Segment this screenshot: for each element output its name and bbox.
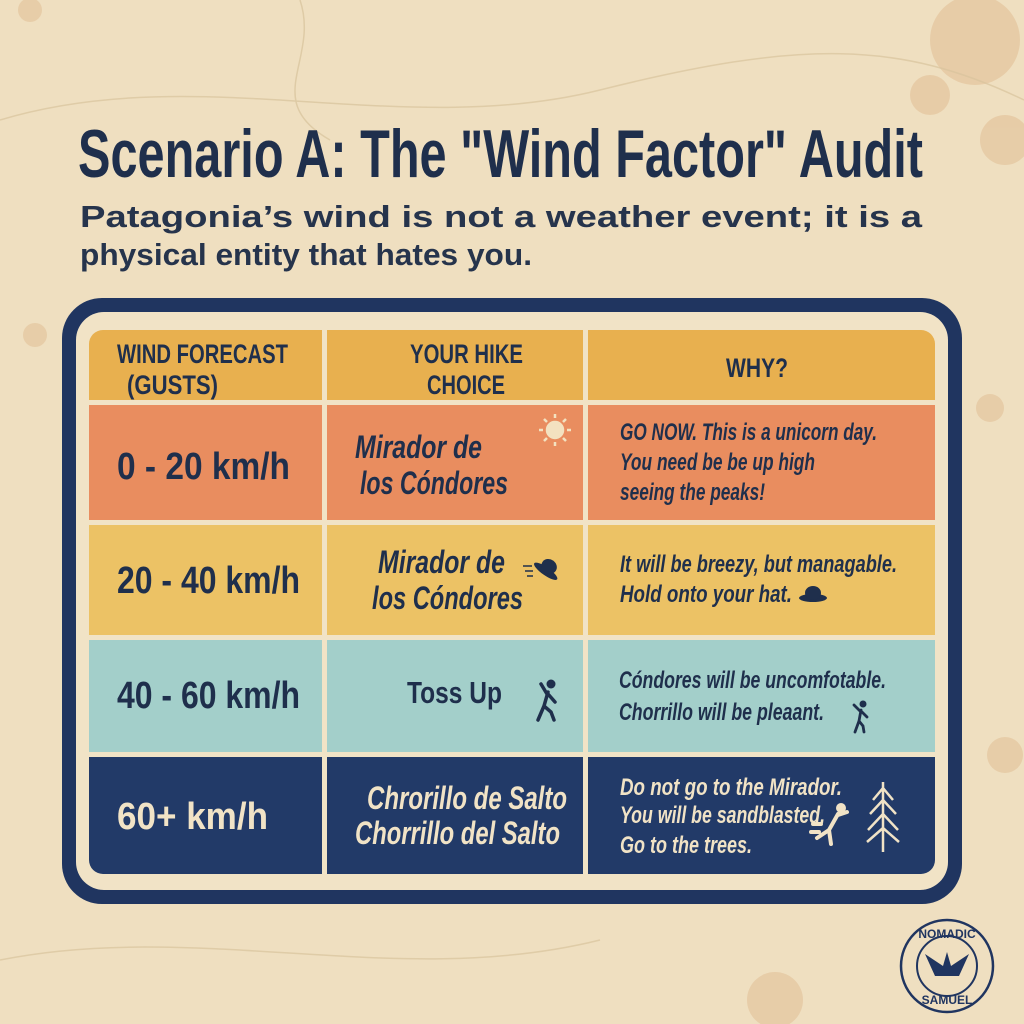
icon: hiker	[538, 680, 556, 720]
header row: (GUSTS)	[127, 370, 218, 400]
header row	[117, 339, 788, 400]
icon: hat	[799, 586, 827, 602]
speed column: 20 - 40 km/h	[117, 560, 300, 602]
header row: CHOICE	[427, 370, 505, 400]
table frame	[62, 298, 962, 904]
speed column: 40 - 60 km/h	[117, 675, 300, 717]
hike choice column: los Cóndores	[360, 465, 508, 501]
why column: You will be sandblasted.	[620, 802, 825, 829]
icon: blown hiker	[811, 803, 847, 844]
hike choice column: Mirador de	[378, 544, 505, 580]
speed column	[117, 446, 300, 838]
why column: Cóndores will be uncomfotable.	[619, 667, 886, 694]
why column: You need be be up high	[620, 449, 815, 476]
subtitle: Patagonia’s wind is not a weather event; it is a	[80, 199, 923, 234]
why column: It will be breezy, but managable.	[620, 551, 897, 578]
hike choice column: Chrorillo de Salto	[367, 780, 567, 816]
subtitle	[80, 199, 923, 272]
logo	[900, 918, 994, 1014]
icon: flying hat	[532, 553, 565, 583]
why column: GO NOW. This is a unicorn day.	[620, 419, 877, 446]
icon: sun	[539, 414, 571, 446]
header row: WHY?	[726, 353, 788, 383]
why column: Chorrillo will be pleaant.	[619, 699, 824, 726]
speed column: 60+ km/h	[117, 796, 268, 838]
why column: seeing the peaks!	[620, 479, 765, 506]
header row: YOUR HIKE	[410, 339, 523, 369]
why column: Do not go to the Mirador.	[620, 774, 842, 801]
subtitle: physical entity that hates you.	[80, 237, 532, 272]
hike choice column: los Cóndores	[372, 580, 523, 616]
why column: Go to the trees.	[620, 832, 752, 859]
header row: WIND FORECAST	[117, 339, 288, 369]
speed column: 0 - 20 km/h	[117, 446, 290, 488]
hike choice column	[355, 429, 567, 851]
logo: SAMUEL	[922, 993, 972, 1007]
icon: small hiker	[854, 700, 867, 732]
table cells	[89, 330, 935, 874]
hike choice column: Mirador de	[355, 429, 482, 465]
why column	[619, 419, 897, 859]
why column: Hold onto your hat.	[620, 581, 792, 608]
hike choice column: Toss Up	[407, 675, 502, 710]
icon: tree	[867, 782, 899, 852]
hike choice column: Chorrillo del Salto	[355, 815, 560, 851]
logo: NOMADIC	[918, 927, 976, 941]
